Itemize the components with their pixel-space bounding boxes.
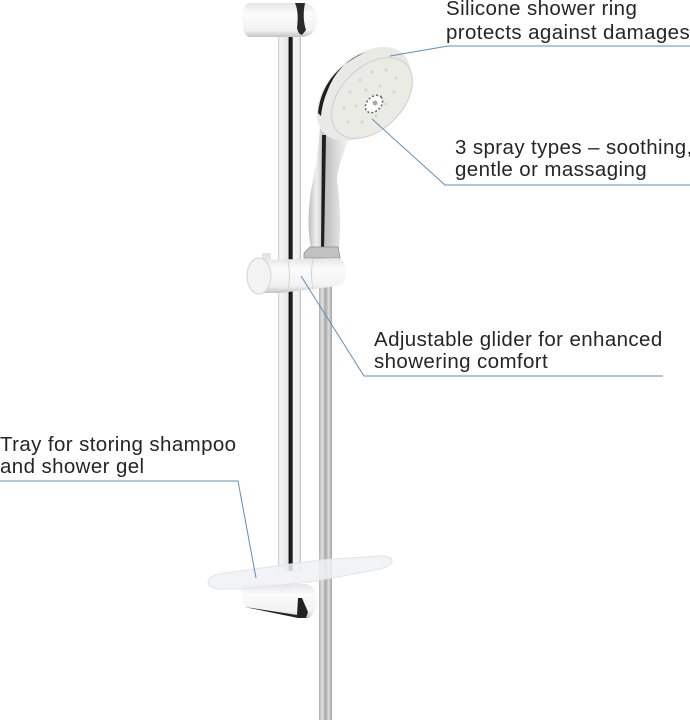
handle: [308, 125, 348, 248]
callout text: tray: Tray for storing shampoo: [0, 433, 236, 456]
head shell: [299, 29, 429, 159]
hand shower: [299, 29, 429, 258]
callout text: glider: showering comfort: [374, 350, 548, 373]
handle dark reflection: [321, 135, 326, 250]
adjustable glider: [247, 253, 346, 294]
callout text: spray types: 3 spray types – soothing,: [455, 136, 690, 159]
nozzle centre: [362, 92, 386, 116]
callout text: glider: Adjustable glider for enhanced: [374, 328, 663, 351]
callout line: glider: [301, 276, 663, 376]
callout line: silicone ring: [390, 46, 690, 56]
callout line: spray types: [372, 119, 690, 185]
callout line: tray: [0, 481, 256, 578]
handle connector: [304, 247, 340, 258]
slide rail: [278, 36, 301, 571]
nozzle dots: [342, 68, 398, 124]
head dark rim: [318, 52, 366, 116]
soap tray: [208, 556, 392, 618]
shower hose: [319, 285, 332, 720]
callout text: spray types: gentle or massaging: [455, 158, 647, 181]
callout text: silicone ring: protects against damages: [446, 21, 690, 44]
top wall bracket: [242, 3, 317, 37]
spray face: [316, 42, 428, 154]
callout text: tray: and shower gel: [0, 455, 144, 478]
